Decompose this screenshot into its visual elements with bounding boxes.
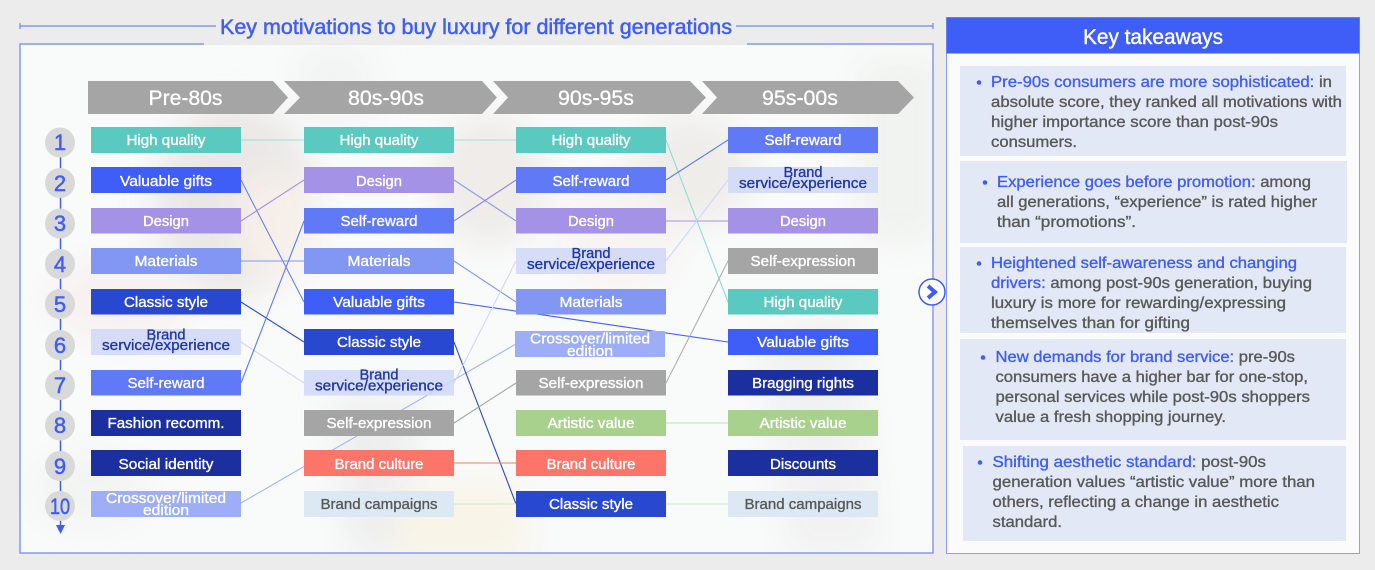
takeaway 5: standard.	[992, 514, 1062, 531]
takeaway 5: Shifting aesthetic standard: post-90s	[992, 454, 1266, 471]
left panel: motivations ranking	[20, 44, 940, 565]
rank axis 1 to 10: 1	[54, 130, 66, 155]
column: Pre-80s motivations: Materials	[134, 253, 198, 270]
takeaway 4: value a fresh shopping journey.	[996, 409, 1226, 426]
column: Pre-80s motivations: High quality	[126, 132, 206, 149]
column: 90s-95s motivations: Materials	[560, 294, 622, 311]
takeaway 3: luxury is more for rewarding/expressing	[991, 295, 1286, 312]
takeaway 2: than “promotions”.	[997, 214, 1136, 231]
column: 95s-00s motivations: Valuable gifts	[757, 334, 849, 351]
takeaway 2: all generations, “experience” is rated higher	[997, 194, 1317, 211]
column: 95s-00s motivations: Discounts	[770, 456, 836, 473]
column: Pre-80s motivations	[91, 127, 241, 519]
column: 90s-95s motivations: Self-expression	[538, 375, 644, 392]
column: 95s-00s motivations: Self-reward	[764, 132, 842, 149]
column: 90s-95s motivations: Artistic value	[548, 415, 634, 432]
takeaway 3: themselves than for gifting	[991, 315, 1190, 332]
column: 90s-95s motivations: Brand culture	[546, 456, 636, 473]
header: 95s-00s	[702, 81, 914, 114]
takeaway 5	[963, 446, 1346, 541]
column: Pre-80s motivations: Design	[143, 213, 189, 230]
column: 80s-90s motivations: Classic style	[337, 334, 421, 351]
takeaway 3: Heightened self-awareness and changing	[991, 255, 1297, 272]
column: 95s-00s motivations: Design	[780, 213, 826, 230]
column: 80s-90s motivations: Design	[356, 173, 402, 190]
column: Pre-80s motivations: Classic style	[124, 294, 208, 311]
column: 80s-90s motivations: Brand	[360, 366, 398, 384]
column: 95s-00s motivations: service/experience	[739, 175, 867, 192]
column: 95s-00s motivations: Bragging rights	[752, 375, 854, 392]
takeaway 5: others, reflecting a change in aesthetic	[992, 494, 1279, 511]
column: 90s-95s motivations: Brand	[572, 245, 610, 262]
column: Pre-80s motivations: Brand	[146, 326, 186, 344]
column: 80s-90s motivations: Materials	[348, 253, 410, 270]
column: 80s-90s motivations: High quality	[340, 132, 419, 149]
rank axis 1 to 10: 5	[54, 292, 66, 317]
column: 90s-95s motivations: High quality	[552, 132, 631, 149]
column: 80s-90s motivations: Self-expression	[326, 415, 432, 432]
takeaway 2: Experience goes before promotion: among	[997, 174, 1311, 191]
rank axis 1 to 10: 2	[54, 171, 66, 196]
takeaway 4: New demands for brand service: pre-90s	[996, 349, 1295, 366]
takeaways header	[946, 18, 1360, 54]
column: 95s-00s motivations: Self-expression	[750, 253, 856, 270]
column: 80s-90s motivations: Brand campaigns	[320, 496, 438, 513]
column: 90s-95s motivations: edition	[567, 343, 613, 360]
column: Pre-80s motivations: Crossover/limited	[106, 490, 226, 507]
column: 95s-00s motivations	[728, 127, 878, 517]
column: Pre-80s motivations: service/experience	[102, 337, 230, 354]
header: 90s-95s: 90s-95s	[558, 87, 634, 110]
rank axis 1 to 10: 7	[54, 373, 66, 398]
takeaway 4: consumers have a higher bar for one-stop,	[996, 369, 1308, 386]
takeaway 1: Pre-90s consumers are more sophisticated: in	[991, 74, 1332, 91]
column: 80s-90s motivations	[304, 127, 454, 517]
column: Pre-80s motivations: Valuable gifts	[120, 173, 212, 190]
column: 90s-95s motivations: Crossover/limited	[530, 330, 650, 348]
header: 95s-00s: 95s-00s	[762, 87, 838, 110]
heading: key motivations: Key motivations to buy luxury for different generations	[220, 16, 732, 39]
header: Pre-80s	[88, 81, 288, 114]
rank axis 1 to 10: 6	[54, 333, 66, 358]
takeaway 4: personal services while post-90s shoppers	[996, 389, 1310, 406]
column: 80s-90s motivations: service/experience	[315, 378, 443, 394]
rank axis 1 to 10: 8	[54, 413, 66, 438]
takeaway 1: consumers.	[991, 134, 1077, 151]
column: 90s-95s motivations	[515, 127, 666, 517]
column: 90s-95s motivations: Classic style	[549, 496, 633, 513]
takeaway 3: drivers: among post-90s generation, buying	[991, 275, 1312, 292]
column: Pre-80s motivations: Self-reward	[128, 375, 204, 392]
column: 90s-95s motivations: service/experience	[527, 256, 655, 273]
column: 95s-00s motivations: Brand campaigns	[744, 496, 862, 513]
takeaway 5: generation values “artistic value” more than	[992, 474, 1315, 491]
header: Pre-80s: Pre-80s	[148, 87, 222, 110]
rank axis 1 to 10: 9	[54, 454, 66, 479]
takeaway 4	[960, 339, 1346, 440]
header: 80s-90s	[284, 81, 497, 114]
column: 90s-95s motivations: Self-reward	[552, 173, 630, 190]
takeaways header: Key takeaways	[1083, 26, 1223, 49]
column: Pre-80s motivations: Social identity	[118, 456, 214, 473]
generation header arrows	[88, 81, 914, 114]
takeaway 2	[960, 161, 1347, 243]
heading: key motivations	[20, 16, 933, 39]
takeaway 1: absolute score, they ranked all motivations with	[991, 94, 1342, 111]
column: Pre-80s motivations: edition	[143, 502, 189, 519]
column: 80s-90s motivations: Self-reward	[340, 213, 418, 230]
column: Pre-80s motivations: Fashion recomm.	[108, 415, 224, 432]
rank axis 1 to 10	[45, 128, 75, 534]
icon: round arrow between panels	[919, 279, 945, 305]
column: 90s-95s motivations: Design	[568, 213, 614, 230]
panel: key takeaways	[946, 18, 1360, 554]
rank axis 1 to 10: 3	[54, 211, 66, 236]
takeaway 1	[960, 66, 1346, 156]
header: 80s-90s: 80s-90s	[348, 87, 424, 110]
column: 95s-00s motivations: Brand	[784, 164, 822, 181]
rank axis 1 to 10: 4	[54, 252, 66, 277]
column: 80s-90s motivations: Brand culture	[334, 456, 424, 473]
takeaway 1: higher importance score than post-90s	[991, 114, 1278, 131]
rank axis 1 to 10: 10	[50, 494, 70, 519]
takeaway 3	[960, 247, 1346, 333]
column: 80s-90s motivations: Valuable gifts	[333, 294, 425, 311]
column: 95s-00s motivations: High quality	[764, 294, 843, 311]
column: 95s-00s motivations: Artistic value	[760, 415, 846, 432]
connector lines between generations	[241, 140, 728, 504]
header: 90s-95s	[493, 81, 706, 114]
